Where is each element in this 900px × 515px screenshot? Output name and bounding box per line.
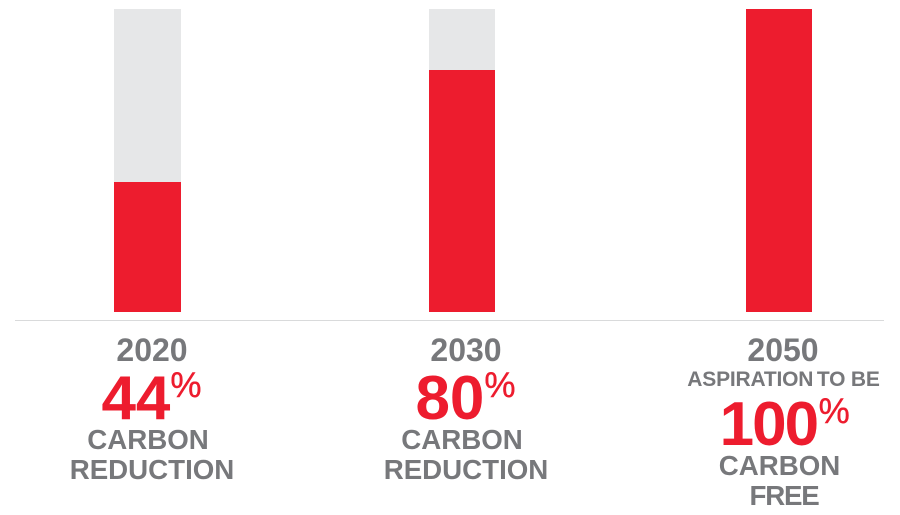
value 44%: 44% — [101, 364, 202, 433]
bar: 2050 100% — [746, 9, 812, 312]
caption carbon reduction: REDUCTION — [384, 454, 548, 485]
year 2030: 2030 — [430, 332, 502, 368]
year 2020: 2020 — [116, 332, 188, 368]
caption carbon reduction: CARBON — [401, 424, 523, 455]
bar: 2020 — [114, 9, 181, 312]
label group: 2020 — [70, 332, 234, 485]
caption carbon reduction — [70, 424, 234, 485]
value 100%: 100% — [720, 390, 850, 459]
caption carbon free: CARBON — [719, 450, 840, 481]
bar fill: 2020 44% — [114, 182, 181, 312]
value 80%: 80% — [415, 364, 516, 433]
label group: 2050 — [687, 332, 880, 511]
bar: 2030 — [429, 9, 495, 312]
caption carbon reduction: REDUCTION — [70, 454, 234, 485]
caption carbon free: FREE — [749, 480, 819, 511]
bar fill: 2030 80% — [429, 70, 495, 312]
aspiration text: ASPIRATION TO BE — [687, 368, 880, 391]
label group: 2030 — [384, 332, 548, 485]
caption carbon reduction: CARBON — [87, 424, 209, 455]
axis line — [15, 320, 884, 321]
caption carbon free — [719, 450, 840, 511]
caption carbon reduction — [384, 424, 548, 485]
year 2050: 2050 — [747, 332, 819, 368]
